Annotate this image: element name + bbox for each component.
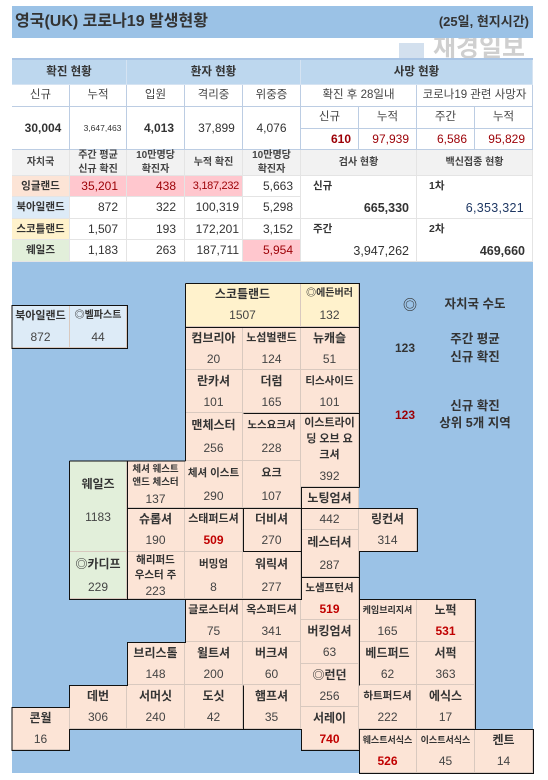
header: weekly average: 신규 확진 [78, 164, 118, 174]
Northamptonshire: 519 [319, 602, 340, 616]
Berkshire: 버크셔 [255, 646, 288, 660]
Oxfordshire [243, 599, 301, 642]
Lancashire: 란카셔 [197, 374, 230, 388]
panel: status table [12, 58, 533, 150]
value: 322 [156, 200, 176, 214]
row label: England [12, 176, 70, 197]
label: new: 신규 [30, 89, 51, 101]
value: death total 2 [475, 129, 533, 150]
Teesside: 티스사이드 [305, 374, 354, 386]
Lincolnshire [359, 508, 417, 552]
label: death total: 누적 [377, 111, 398, 123]
Cambridgeshire: 케임브리지셔 [363, 604, 412, 614]
Herefordshire and Worcestershire: 해리퍼드 [136, 554, 175, 566]
Hertfordshire: 222 [377, 710, 398, 724]
Kent: 켄트 [492, 733, 515, 747]
value: 1,183 [88, 243, 118, 257]
title bar [12, 6, 533, 38]
value: death new [301, 129, 359, 150]
label: death weekly [417, 107, 475, 129]
value: 1,507 [88, 222, 118, 236]
Scotland: 스코틀랜드 [215, 287, 270, 301]
Oxfordshire: 341 [261, 624, 282, 638]
Bedfordshire [359, 642, 417, 685]
Shropshire: 190 [145, 533, 166, 547]
Wiltshire [185, 642, 243, 685]
row label: Scotland: 스코틀랜드 [16, 222, 65, 234]
value: 5,663 [263, 178, 293, 192]
value: hospital [127, 107, 185, 150]
row label: Wales [12, 240, 70, 262]
Kent [475, 729, 533, 773]
Nottinghamshire: 노팅엄셔 [307, 490, 352, 504]
value: death total [359, 129, 417, 150]
row label: Scotland [12, 219, 70, 240]
Gloucestershire: 글로스터셔 [188, 604, 239, 616]
label: covid related deaths [417, 85, 533, 107]
value: 35,201 [81, 178, 118, 192]
Cumbria: 20 [207, 352, 220, 366]
label: 1차 [429, 180, 444, 192]
label: death new [301, 107, 359, 129]
Birmingham: 8 [210, 580, 217, 594]
label: hospital: 입원 [145, 89, 166, 101]
header: tests: 검사 현황 [339, 157, 378, 168]
value: 187,711 [196, 243, 239, 257]
watermark logo [399, 38, 525, 59]
value [185, 197, 243, 219]
label: critical [243, 85, 301, 107]
Norfolk [417, 599, 475, 642]
Warwickshire: 워릭셔 [255, 556, 288, 570]
value: death new: 610 [331, 132, 351, 146]
Edinburgh: 132 [319, 308, 340, 322]
Teesside [301, 370, 359, 413]
label: death total 2 [475, 107, 533, 129]
Nottinghamshire [301, 487, 359, 530]
Edinburgh [301, 283, 359, 327]
Manchester: 맨체스터 [191, 418, 236, 432]
Shropshire [127, 508, 185, 552]
Bedfordshire: 베드퍼드 [365, 646, 410, 660]
header: per 100k: 확진자 [142, 164, 169, 174]
Bristol: 148 [145, 666, 166, 680]
vaccine: first dose [417, 176, 533, 219]
label: within 28 days [301, 85, 417, 107]
value: hospital: 4,013 [144, 120, 174, 134]
Cheshire East: 체셔 이스트 [188, 466, 239, 478]
Derbyshire: 더비셔 [255, 512, 288, 526]
legend [395, 297, 511, 430]
Dorset: 42 [207, 710, 220, 724]
Herefordshire and Worcestershire [127, 552, 185, 599]
label: death weekly: 주간 [435, 111, 456, 123]
Somerset [127, 685, 185, 729]
value: 5,298 [263, 200, 293, 214]
Cornwall [12, 707, 70, 750]
value: new cases [12, 107, 70, 150]
East Riding of Yorkshire: 딩 오브 요 [306, 433, 353, 445]
value: 5,954 [263, 243, 293, 257]
label: quarantine: 격리중 [198, 89, 229, 101]
value [70, 197, 127, 219]
row label: Northern Ireland: 북아일랜드 [16, 201, 65, 213]
label: death total [359, 107, 417, 129]
Cumbria: 컴브리아 [191, 330, 236, 344]
header: cumulative [185, 150, 243, 176]
Surrey: 서레이 [313, 710, 346, 724]
London: ◎런던 [312, 668, 347, 682]
value: 469,660 [480, 244, 525, 258]
header: cumulative: 누적 확진 [194, 157, 233, 168]
Norfolk: 531 [435, 624, 456, 638]
row label: England: 잉글랜드 [21, 180, 60, 192]
London [301, 664, 359, 707]
row label: Northern Ireland [12, 197, 70, 219]
legend: number sample: 123 [395, 341, 415, 355]
Surrey [301, 707, 359, 750]
Derbyshire: 270 [261, 533, 282, 547]
West Sussex: 526 [377, 754, 398, 768]
Wiltshire: 윌트셔 [197, 646, 230, 660]
label: new [12, 85, 70, 107]
Manchester [185, 413, 243, 461]
Cheshire East: 290 [203, 488, 224, 502]
East Riding of Yorkshire: 이스트라이 [304, 417, 355, 429]
Warwickshire [243, 552, 301, 599]
label: 2차 [429, 223, 444, 235]
Lancashire [185, 370, 243, 413]
Scotland [185, 283, 301, 327]
West Sussex [359, 729, 417, 773]
heading: patients: 환자 현황 [191, 66, 236, 78]
Newcastle: 51 [323, 352, 336, 366]
legend: capital symbol: ◎ [403, 297, 417, 313]
Bristol: 브리스톨 [133, 646, 178, 660]
value: death weekly: 6,586 [437, 132, 467, 146]
header: per 100k cases: 10만명당 [252, 150, 291, 161]
Northamptonshire [301, 577, 359, 620]
Wales: 1183 [85, 510, 111, 524]
value [243, 197, 301, 219]
value: critical [243, 107, 301, 150]
header: vaccine [417, 150, 533, 176]
legend: top five text: 신규 확진 [450, 399, 500, 413]
Buckinghamshire [301, 620, 359, 664]
Northumberland: 124 [261, 352, 282, 366]
value: total cases [70, 107, 127, 150]
Northamptonshire: 노샘프턴셔 [305, 582, 354, 594]
header: per 100k cases: 확진자 [258, 164, 285, 174]
Devon: 306 [88, 710, 108, 724]
header: tests [301, 150, 417, 176]
value [127, 219, 185, 240]
label: critical: 위중증 [256, 89, 287, 101]
heading: patients [127, 60, 301, 85]
header: nation: 자치국 [27, 157, 54, 168]
value: 665,330 [364, 201, 409, 215]
Birmingham: 버밍엄 [199, 558, 228, 570]
label: death total 2: 누적 [493, 111, 514, 123]
legend: top five text: 상위 5개 지역 [439, 416, 511, 430]
Derbyshire [243, 508, 301, 552]
heading: deaths: 사망 현황 [394, 66, 439, 78]
Hampshire [243, 685, 301, 729]
label: total: 누적 [87, 89, 109, 101]
Cumbria [185, 327, 243, 370]
legend: top five text [439, 399, 511, 430]
Nottinghamshire: 442 [319, 512, 340, 526]
legend: weekly average text: 신규 확진 [450, 350, 500, 364]
Lincolnshire: 314 [377, 533, 398, 547]
Scotland: 1507 [229, 308, 256, 322]
Suffolk: 363 [435, 666, 456, 680]
Cardiff: ◎카디프 [75, 556, 121, 570]
York [243, 461, 301, 508]
panel: UK map [12, 262, 534, 774]
value [243, 176, 301, 197]
North Yorkshire [243, 413, 301, 461]
Cambridgeshire [359, 599, 417, 642]
Essex: 에식스 [429, 689, 462, 703]
legend: capital text: 자치국 수도 [444, 297, 505, 311]
Devon [70, 685, 127, 729]
label: within 28 days: 확진 후 28일내 [322, 89, 395, 101]
value [70, 176, 127, 197]
heading: deaths [301, 60, 533, 85]
label: quarantine [185, 85, 243, 107]
Newcastle [301, 327, 359, 370]
East Sussex: 45 [439, 754, 452, 768]
Bedfordshire: 62 [381, 666, 394, 680]
value [185, 240, 243, 262]
label: 주간 [313, 223, 332, 235]
Northern Ireland [12, 305, 70, 348]
value: critical: 4,076 [256, 120, 287, 134]
header: per 100k: 10만명당 [136, 150, 175, 161]
North Yorkshire: 노스요크셔 [247, 419, 296, 431]
York: 요크 [261, 466, 282, 478]
header: weekly average [70, 150, 127, 176]
Belfast [70, 305, 127, 348]
Berkshire [243, 642, 301, 685]
title: 영국(UK) 코로나19 발생현황 [15, 13, 208, 30]
Dorset [185, 685, 243, 729]
value: 872 [98, 200, 118, 214]
header: weekly average: 주간 평균 [78, 150, 118, 161]
header: vaccine: 백신접종 현황 [446, 157, 503, 168]
value [185, 176, 243, 197]
panel: nations table [12, 150, 533, 262]
icon: logo mark [399, 43, 424, 58]
value: 100,319 [196, 200, 239, 214]
East Sussex: 이스트서식스 [421, 735, 470, 745]
value: 438 [156, 178, 176, 192]
Gloucestershire [185, 599, 243, 642]
heading: confirmed [12, 60, 127, 85]
North Yorkshire: 228 [261, 441, 282, 455]
value: 172,201 [196, 222, 239, 236]
Somerset: 서머싯 [139, 689, 172, 703]
Cornwall: 콘월 [29, 710, 52, 724]
East Sussex [417, 729, 475, 773]
York: 107 [261, 488, 282, 502]
header: nation [12, 150, 70, 176]
East Riding of Yorkshire: 392 [319, 469, 340, 483]
value [127, 176, 185, 197]
Northern Ireland: 872 [30, 330, 51, 344]
Manchester: 256 [203, 441, 224, 455]
Essex: 17 [439, 710, 452, 724]
legend: weekly average text [450, 332, 500, 364]
Essex [417, 685, 475, 729]
Belfast: ◎벨파스트 [75, 310, 121, 320]
label: death new: 신규 [319, 111, 340, 123]
tests: new [301, 176, 417, 219]
Buckinghamshire: 63 [323, 645, 336, 659]
value [243, 219, 301, 240]
label: hospital [127, 85, 185, 107]
value: 6,353,321 [466, 201, 524, 215]
value: 193 [156, 222, 176, 236]
value: 3,947,262 [353, 244, 409, 258]
Hampshire: 35 [265, 710, 278, 724]
date note: (25일, 현지시간) [439, 14, 529, 29]
Staffordshire [185, 508, 243, 552]
Wales: 웨일즈 [81, 477, 115, 491]
Staffordshire: 509 [203, 533, 224, 547]
Herefordshire and Worcestershire: 223 [145, 584, 166, 598]
Leicestershire: 287 [319, 558, 340, 572]
Cheshire West and Chester: 체셔 웨스트 [132, 464, 179, 474]
Oxfordshire: 옥스퍼드셔 [246, 604, 297, 616]
Berkshire: 60 [265, 666, 278, 680]
Warwickshire: 277 [261, 580, 282, 594]
header: per 100k [127, 150, 185, 176]
value: total cases: 3,647,463 [84, 122, 121, 132]
label: 신규 [313, 180, 332, 192]
vaccine: second dose [417, 219, 533, 262]
value [185, 219, 243, 240]
West Sussex: 웨스트서식스 [363, 735, 412, 745]
Shropshire: 슈롭셔 [139, 512, 172, 526]
value [127, 240, 185, 262]
value: death total: 97,939 [372, 132, 409, 146]
value: new cases: 30,004 [25, 120, 61, 134]
Suffolk [417, 642, 475, 685]
value [127, 197, 185, 219]
Cardiff [70, 552, 127, 599]
Durham: 더럼 [260, 374, 283, 388]
value [243, 240, 301, 262]
value: 3,187,232 [193, 180, 239, 192]
Hertfordshire: 하트퍼드셔 [363, 690, 412, 702]
Northern Ireland: 북아일랜드 [15, 310, 66, 322]
tests: weekly [301, 219, 417, 262]
value [70, 240, 127, 262]
Herefordshire and Worcestershire: 우스터 주 [135, 568, 176, 580]
Norfolk: 노퍽 [434, 602, 457, 616]
value: death total 2: 95,829 [488, 132, 525, 146]
Newcastle: 뉴캐슬 [313, 330, 346, 344]
Belfast: 44 [91, 330, 105, 344]
row label: Wales: 웨일즈 [26, 244, 55, 256]
value: death weekly [417, 129, 475, 150]
London: 256 [319, 688, 340, 702]
Somerset: 240 [145, 710, 166, 724]
Durham [243, 370, 301, 413]
legend: red number sample: 123 [395, 408, 415, 422]
Northumberland: 노섬벌랜드 [246, 332, 297, 344]
value [70, 219, 127, 240]
Teesside: 101 [319, 394, 340, 408]
Wiltshire: 200 [203, 666, 224, 680]
Lancashire: 101 [203, 394, 224, 408]
Cardiff: 229 [88, 580, 108, 594]
Wales [70, 461, 127, 552]
Cheshire West and Chester: 137 [145, 492, 166, 506]
East Riding of Yorkshire [301, 413, 359, 487]
heading: confirmed: 확진 현황 [46, 66, 92, 78]
map background [12, 262, 533, 773]
value: 263 [156, 243, 176, 257]
Gloucestershire: 75 [207, 624, 220, 638]
legend: weekly average text: 주간 평균 [450, 332, 500, 346]
Devon: 데번 [87, 689, 109, 703]
Buckinghamshire: 버킹엄셔 [307, 624, 352, 638]
Hertfordshire [359, 685, 417, 729]
label: covid related deaths: 코로나19 관련 사망자 [423, 89, 526, 101]
label: total [70, 85, 127, 107]
Birmingham [185, 552, 243, 599]
Hampshire: 햄프셔 [255, 689, 288, 703]
Cambridgeshire: 165 [377, 624, 398, 638]
Cheshire West and Chester [127, 461, 185, 508]
value: 3,152 [263, 222, 293, 236]
Leicestershire [301, 530, 359, 577]
Kent: 14 [497, 754, 510, 768]
Northumberland [243, 327, 301, 370]
Edinburgh: ◎에든버러 [306, 288, 353, 299]
value: quarantine [185, 107, 243, 150]
Cheshire West and Chester: 앤드 체스터 [132, 476, 179, 488]
Cheshire East [185, 461, 243, 508]
Lincolnshire: 링컨셔 [371, 512, 404, 526]
Staffordshire: 스태퍼드셔 [188, 513, 239, 525]
East Riding of Yorkshire: 크셔 [319, 449, 340, 461]
Bristol [127, 642, 185, 685]
Durham: 165 [261, 394, 282, 408]
Suffolk: 서퍽 [434, 646, 457, 660]
header: per 100k cases [243, 150, 301, 176]
Dorset: 도싯 [202, 689, 225, 703]
Surrey: 740 [319, 732, 340, 746]
Leicestershire: 레스터셔 [307, 534, 352, 548]
Cornwall: 16 [34, 732, 47, 746]
value: quarantine: 37,899 [198, 120, 235, 134]
